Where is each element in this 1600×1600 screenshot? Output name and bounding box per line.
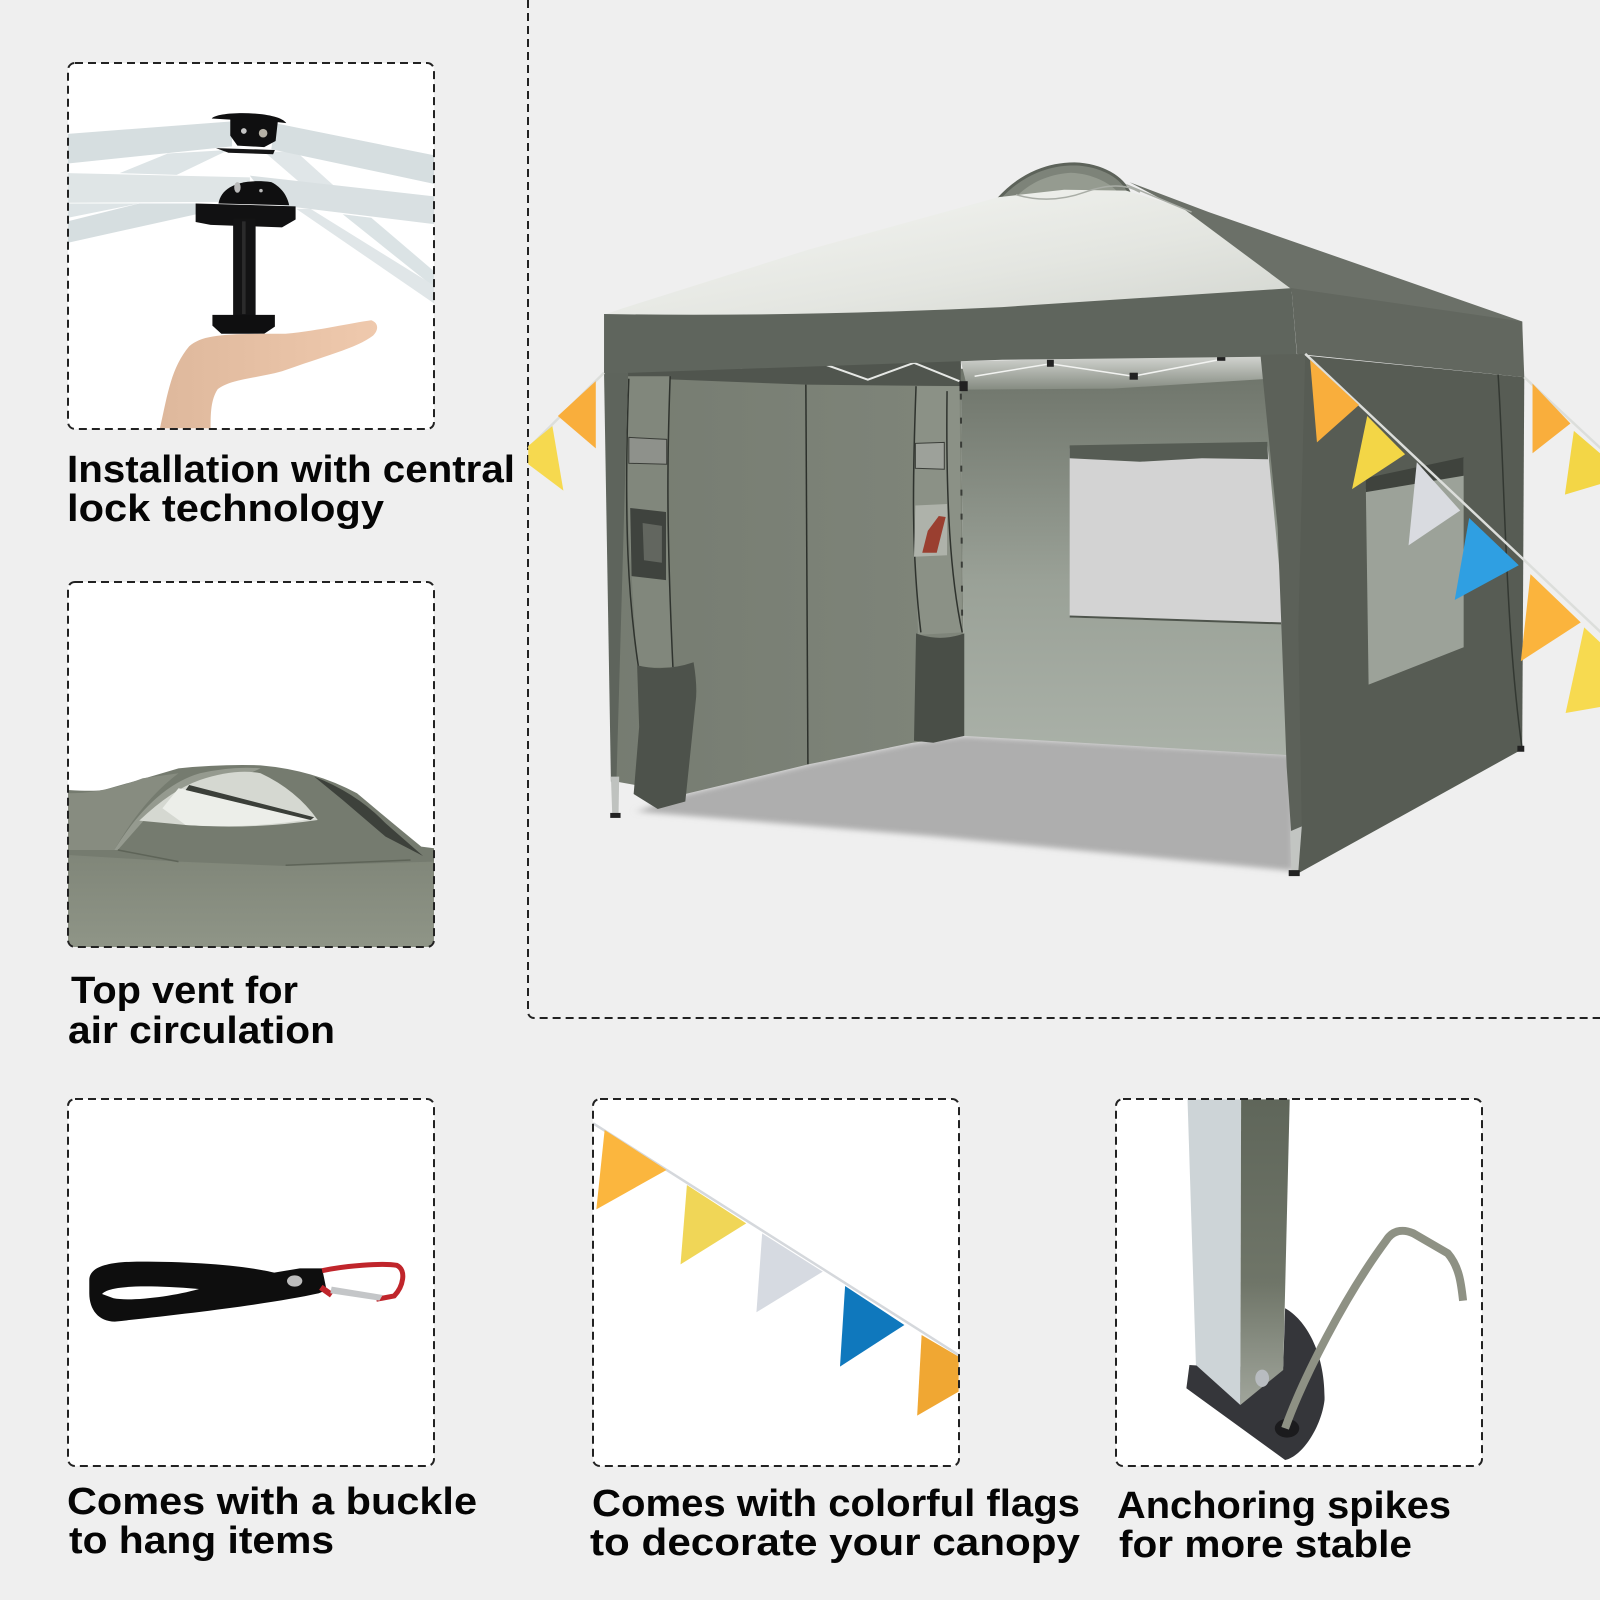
label: flags: Comes with colorful flags (592, 1483, 1080, 1525)
panel: buckle (68, 1099, 434, 1466)
photo: post and spike (1186, 1099, 1463, 1460)
label: anchoring spike (1117, 1485, 1451, 1566)
left sandbag (634, 662, 696, 809)
panel: main canopy frame (528, 0, 1600, 1018)
post (1188, 1099, 1241, 1405)
spike (1285, 1231, 1463, 1428)
bunting strings (528, 354, 1600, 652)
frame under canopy (627, 355, 1269, 391)
corner flap (1260, 354, 1305, 836)
label: buckle: Comes with a buckle (67, 1481, 477, 1523)
panel: central lock (68, 63, 434, 429)
top vent (999, 164, 1130, 199)
panel: flags (593, 1099, 959, 1466)
panel: anchoring spike (1116, 1099, 1482, 1466)
photo: top vent (68, 765, 434, 948)
photo: frame and hub (68, 113, 434, 428)
right valance (1291, 288, 1524, 377)
label: central lock: lock technology (67, 488, 384, 530)
bunting flags right (1310, 360, 1600, 713)
label: top vent: Top vent for (71, 970, 298, 1012)
hand (160, 320, 377, 428)
wall seam (806, 385, 808, 764)
right pocket strip (913, 386, 962, 635)
right sandbag (914, 633, 964, 743)
roof white face (606, 190, 1291, 319)
label: central lock (67, 449, 515, 530)
top hub (212, 113, 286, 154)
floor shadow (637, 736, 1295, 871)
label: top vent (68, 970, 335, 1052)
right wall edge (1498, 375, 1522, 749)
corner foot (1289, 746, 1524, 876)
main canopy illustration (528, 164, 1600, 876)
base plate (1186, 1308, 1325, 1460)
left post and wall edge (604, 373, 628, 818)
label: anchoring spike: for more stable (1119, 1524, 1412, 1566)
icon: bunting flags (593, 1123, 959, 1416)
roof right face (1130, 182, 1522, 361)
back inner wall (961, 369, 1298, 756)
label: buckle: to hang items (69, 1520, 334, 1562)
right wall window (1366, 457, 1464, 685)
roof wrinkles (1016, 185, 1192, 212)
left pocket strip (623, 376, 673, 667)
label: central lock: Installation with central (67, 449, 515, 491)
right wall (1295, 355, 1524, 875)
front valance (604, 288, 1297, 374)
label: buckle (67, 1481, 477, 1562)
panel: top vent (68, 582, 434, 948)
bunting flags left (528, 381, 596, 491)
back wall window (1070, 442, 1285, 624)
label: top vent: air circulation (68, 1010, 335, 1052)
label: flags: to decorate your canopy (590, 1522, 1080, 1564)
icon: strap and carabiner (89, 1262, 403, 1322)
label: flags (590, 1483, 1080, 1564)
label: anchoring spike: Anchoring spikes (1117, 1485, 1451, 1527)
left inner wall (613, 364, 964, 794)
lower hub and pole (196, 181, 296, 334)
